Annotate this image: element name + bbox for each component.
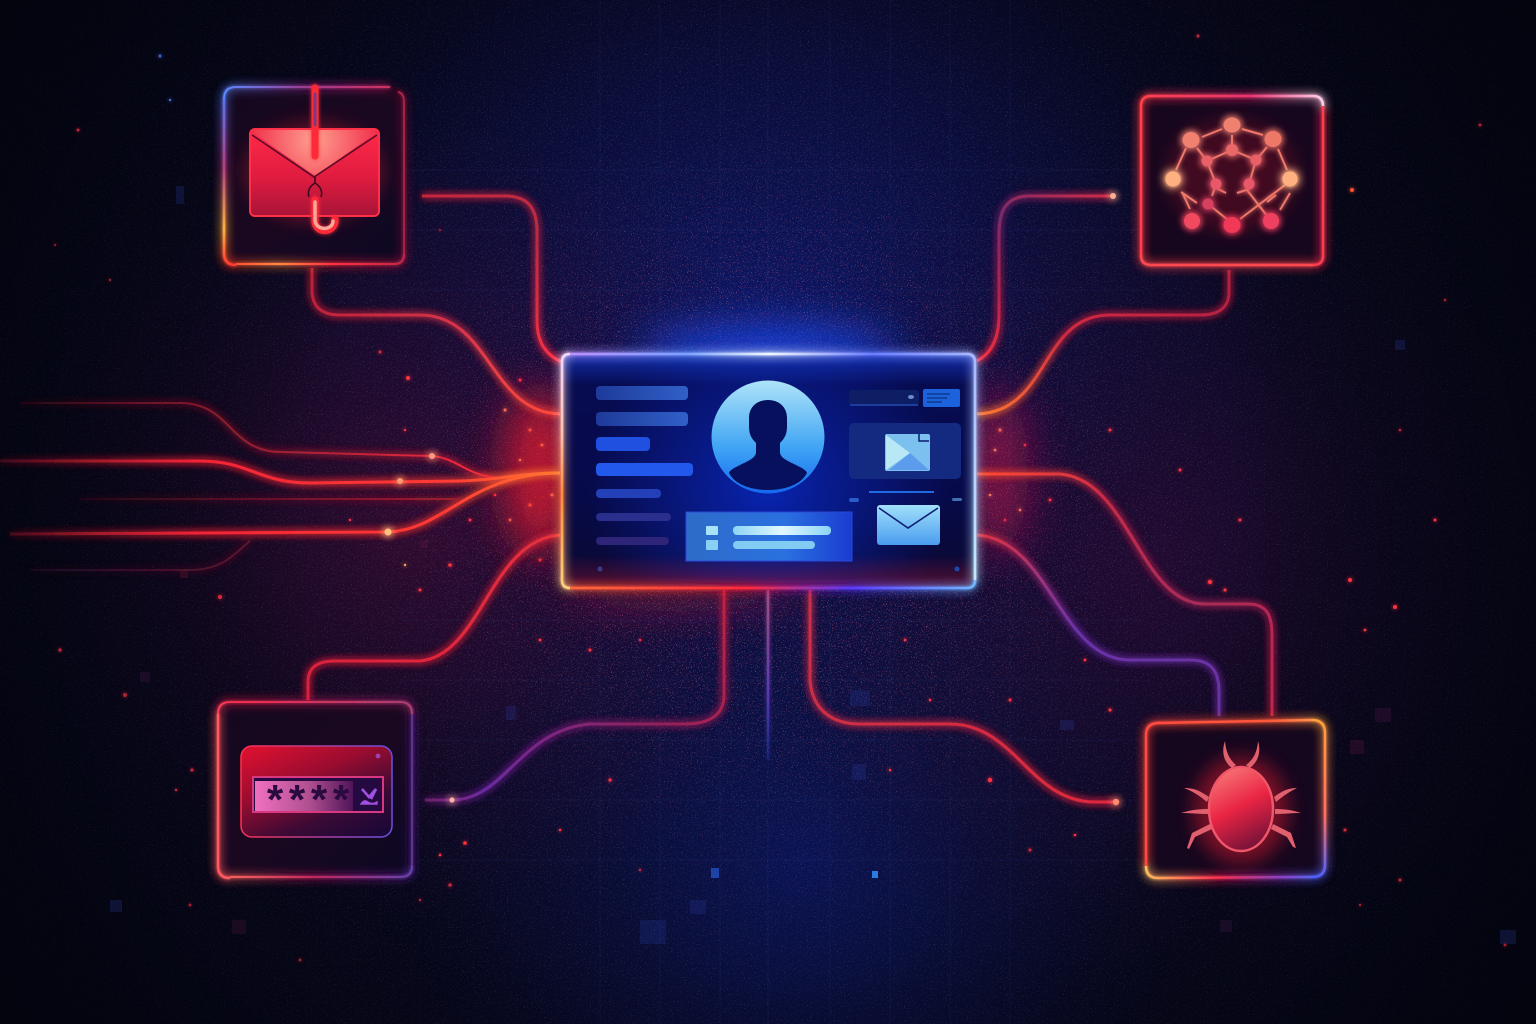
icon: network graph bbox=[1166, 118, 1298, 233]
connector: panel to bug node bbox=[810, 590, 1116, 802]
panel: stolen password card bbox=[218, 702, 412, 878]
panel: botnet network card bbox=[1141, 96, 1323, 266]
icon: password field: * bbox=[311, 776, 328, 823]
icon: user avatar bbox=[712, 380, 824, 494]
connector: network to panel, upper bbox=[977, 196, 1112, 361]
connector: panel to bug, inner bbox=[977, 535, 1219, 716]
small dividers bbox=[849, 491, 962, 502]
icon: envelope with hook bbox=[244, 88, 384, 231]
text lines: left list bbox=[596, 386, 693, 545]
panel: central identity dashboard bbox=[562, 354, 975, 588]
connector: network to panel, lower bbox=[977, 270, 1229, 414]
glowing connector nodes bbox=[384, 193, 1119, 805]
decorative faint squares bbox=[110, 186, 1516, 944]
connector: panel to bug, outer bbox=[977, 474, 1272, 716]
top right toolbar bbox=[849, 389, 960, 407]
connector: password to panel bbox=[308, 535, 560, 700]
icon: password field: * bbox=[267, 776, 284, 823]
icon: bug bbox=[1181, 741, 1301, 864]
connector: envelope to panel, upper bbox=[422, 196, 562, 362]
bottom info box bbox=[686, 512, 852, 561]
connector: envelope to panel, lower bbox=[312, 268, 560, 414]
connectors: incoming left traces bbox=[0, 403, 560, 570]
icon: mail bbox=[877, 505, 940, 545]
icon: password field: * bbox=[289, 776, 306, 823]
panel: phishing email card bbox=[224, 87, 404, 265]
connector: centre drop bbox=[767, 590, 769, 760]
connector: panel to password node bbox=[425, 590, 724, 800]
icon: password field: * bbox=[333, 776, 350, 823]
panel: malware bug card bbox=[1146, 720, 1325, 878]
icon: password field bbox=[241, 746, 392, 837]
image preview tile bbox=[849, 423, 961, 479]
ambient glow behind centre panel bbox=[504, 332, 1028, 602]
